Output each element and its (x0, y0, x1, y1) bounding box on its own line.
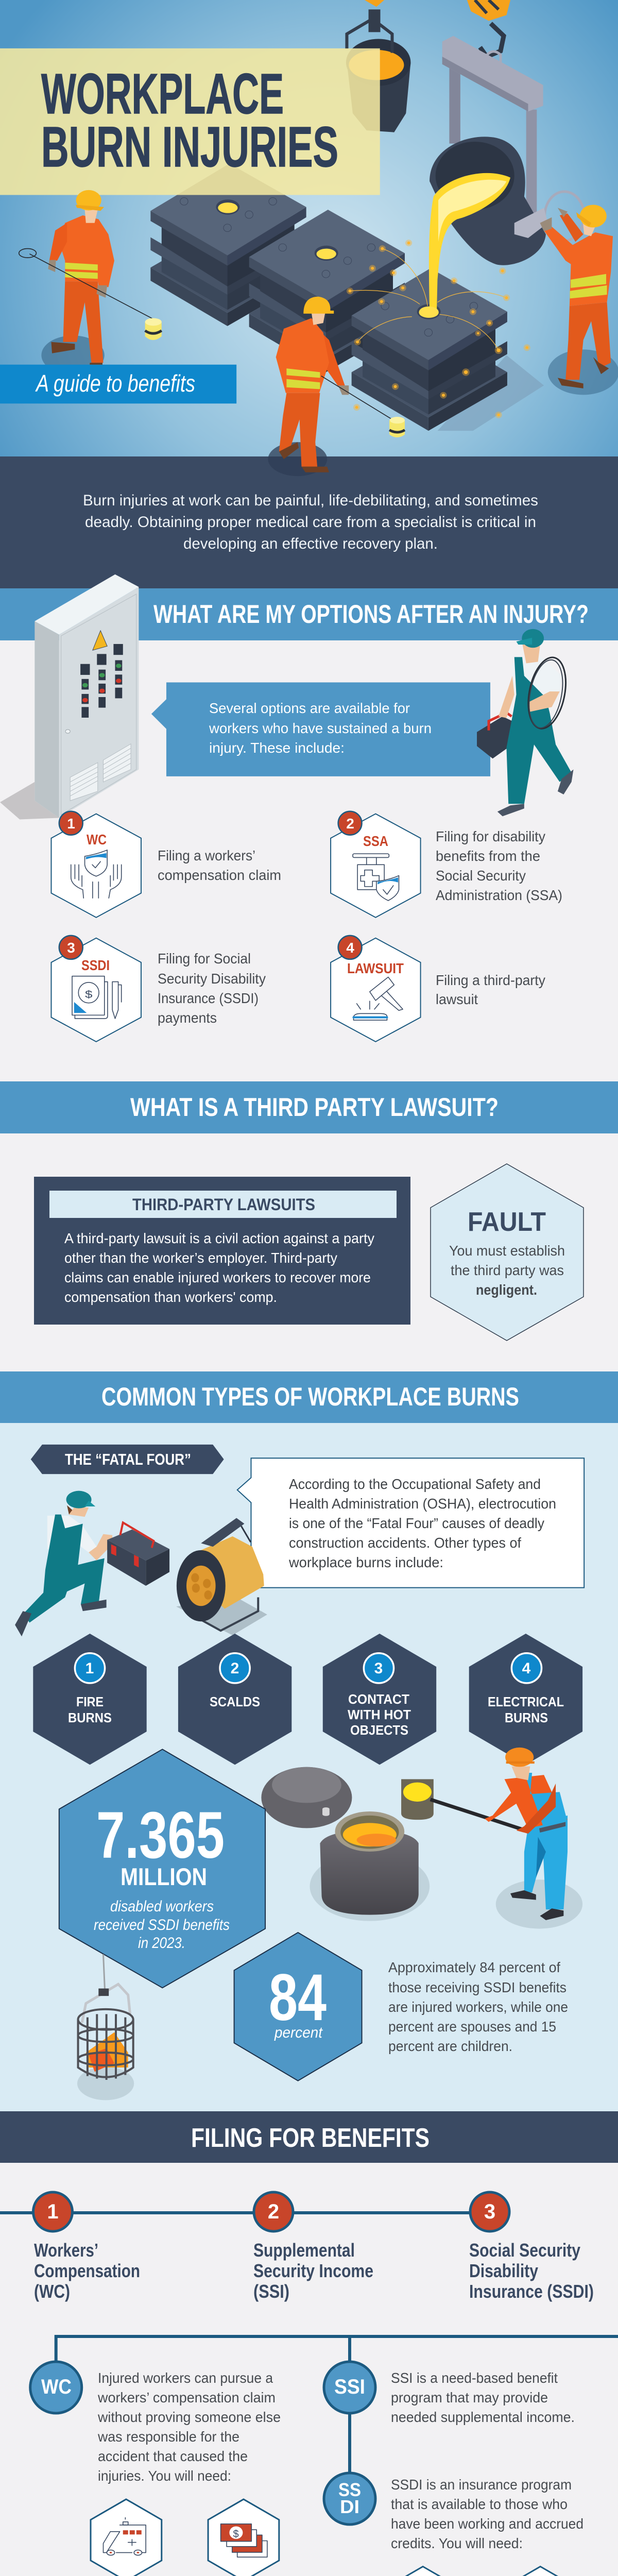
options heading band (0, 588, 618, 640)
fault text: negligent. (476, 1282, 537, 1298)
callout text: injury. These include: (209, 740, 345, 756)
circle labels (41, 2376, 365, 2517)
option descriptions: compensation claim (158, 867, 281, 883)
ssdi breakdown text: Approximately 84 percent of (388, 1959, 560, 1975)
main title: BURN INJURIES (41, 115, 338, 179)
hero banner (0, 48, 380, 195)
timeline numbers (47, 2200, 495, 2223)
fault hexagon (431, 1164, 583, 1341)
benefit names: Supplemental (253, 2240, 355, 2261)
burn hexagon 2 (178, 1634, 291, 1765)
ssdi breakdown text (388, 1959, 568, 2054)
furnace pot (310, 1811, 430, 1921)
electrician with cable (477, 629, 574, 816)
circle labels: SSI (334, 2376, 365, 2398)
option descriptions: Insurance (SSDI) (158, 990, 259, 1006)
options section background (0, 588, 618, 1082)
WC text: injuries. You will need: (98, 2468, 231, 2484)
callout text: Several options are available for (209, 700, 410, 716)
burn labels: WITH HOT (348, 1707, 411, 1722)
timeline line (0, 2211, 490, 2214)
percent label: percent (274, 2024, 323, 2041)
option descriptions: payments (158, 1010, 217, 1026)
foundry worker head (505, 1748, 535, 1780)
hexagon labels: SSA (363, 833, 388, 849)
ssdi breakdown text: percent are spouses and 15 (388, 2019, 556, 2035)
burn numbers: 2 (231, 1660, 239, 1677)
timeline circle 3 (470, 2192, 509, 2231)
fault text: You must establish (449, 1243, 565, 1259)
taxes hexagon (505, 2567, 576, 2576)
timeline circle 2 (254, 2192, 293, 2231)
fatal four text: Health Administration (OSHA), electrocution (289, 1496, 556, 1512)
fatal four text (288, 1476, 556, 1570)
badge 4 (338, 936, 362, 959)
badge 2 (338, 811, 362, 835)
hexagon 1 (51, 814, 141, 918)
number circles (75, 1653, 542, 1683)
hexagon labels: LAWSUIT (347, 960, 404, 976)
panel text: compensation than workers' comp. (64, 1289, 277, 1305)
option descriptions: Social Security (436, 868, 526, 884)
mould stacks (150, 164, 544, 431)
fatal four text: According to the Occupational Safety and (289, 1476, 541, 1492)
burns heading band (0, 1371, 618, 1423)
benefit names: Security Income (253, 2260, 373, 2281)
burn labels: SCALDS (210, 1694, 260, 1709)
7.365 stat (94, 1799, 230, 1952)
burn hexagon 3 (323, 1634, 436, 1765)
cable reel (176, 1518, 267, 1635)
icon: $ on document: $ (85, 989, 92, 1000)
WC text (97, 2370, 281, 2484)
timeline numbers: 1 (47, 2200, 59, 2223)
hexagon labels: WC (87, 832, 107, 848)
intro band background (0, 456, 618, 590)
sparks (349, 242, 528, 416)
benefit names: Disability (469, 2260, 538, 2281)
burn labels: OBJECTS (350, 1722, 408, 1738)
callout panel (151, 682, 490, 776)
badge numbers (67, 816, 354, 956)
connector lines (56, 2336, 618, 2504)
history hexagon (387, 2567, 458, 2576)
foundry worker (485, 1773, 582, 1929)
wages hexagon (208, 2499, 279, 2576)
fault text: the third party was (451, 1262, 564, 1278)
SSDI text: that is available to those who (391, 2496, 568, 2512)
burn labels: ELECTRICAL (488, 1694, 564, 1709)
benefit names: Social Security (469, 2240, 580, 2261)
heading: filing: FILING FOR BENEFITS (191, 2123, 430, 2153)
hexagon 2 (331, 814, 421, 918)
stat caption (94, 1898, 230, 1952)
benefit names: (WC) (34, 2281, 70, 2302)
ssdi breakdown text: those receiving SSDI benefits (388, 1979, 566, 1995)
burn labels: CONTACT (348, 1691, 409, 1707)
hexagon 4 (331, 938, 421, 1042)
84 percent stat: 84 (269, 1961, 327, 2035)
benefit names: Workers’ (34, 2240, 98, 2261)
subtitle: A guide to benefits (35, 370, 195, 397)
option descriptions: Administration (SSA) (436, 887, 562, 903)
burn labels: BURNS (505, 1710, 548, 1725)
circle labels: DI (340, 2496, 359, 2517)
hanging ladle (346, 0, 410, 132)
ssdi breakdown text: percent are children. (388, 2038, 512, 2054)
SSDI circle (324, 2473, 375, 2524)
option descriptions: Security Disability (158, 971, 266, 987)
burn numbers: 4 (522, 1660, 531, 1677)
WC text: Injured workers can pursue a (98, 2370, 273, 2386)
option descriptions: benefits from the (436, 848, 540, 864)
requirement artwork (44, 2499, 618, 2576)
fatal four tag text: THE “FATAL FOUR” (65, 1450, 191, 1468)
84 hexagon (234, 1933, 362, 2081)
SSDI text: SSDI is an insurance program (391, 2477, 572, 2493)
hexagon labels: SSDI (81, 957, 110, 973)
filing section background (0, 2163, 618, 2576)
callout text: workers who have sustained a burn (209, 720, 432, 736)
electrical cabinet (0, 574, 139, 819)
toolbox (107, 1522, 169, 1586)
badge numbers: 3 (67, 940, 75, 956)
option descriptions: Filing a workers’ (158, 848, 255, 863)
third party panel (34, 1177, 410, 1325)
burn labels: FIRE (76, 1694, 104, 1709)
SSI text (391, 2370, 575, 2425)
SSDI text (391, 2477, 583, 2551)
panel text: other than the worker’s employer. Third-party (64, 1250, 337, 1266)
crucible and rod (401, 1779, 548, 1838)
icon: gavel (353, 977, 403, 1020)
SSI text: needed supplemental income. (391, 2409, 575, 2425)
callout text (209, 700, 432, 756)
burn hexagon 4 (469, 1634, 582, 1765)
panel heading bar (49, 1191, 397, 1218)
left worker (19, 190, 162, 375)
right worker (540, 205, 618, 395)
burn labels (68, 1691, 564, 1738)
burns section background (0, 1423, 618, 2112)
circle labels: SS (338, 2479, 361, 2500)
panel text (64, 1230, 374, 1305)
icon: ambulance (104, 2518, 146, 2555)
WC text: accident that caused the (98, 2448, 248, 2464)
stat caption: received SSDI benefits (94, 1917, 230, 1934)
hexagon 3 (51, 938, 141, 1042)
ssdi breakdown text: are injured workers, while one (388, 1999, 568, 2015)
fatal four tag (31, 1445, 224, 1474)
blue tag (0, 365, 236, 403)
option descriptions: lawsuit (436, 991, 478, 1007)
filing heading band (0, 2111, 618, 2163)
WC text: without proving someone else (97, 2409, 281, 2425)
benefit names: Insurance (SSDI) (469, 2281, 594, 2302)
third party heading band (0, 1081, 618, 1133)
burn labels: BURNS (68, 1710, 112, 1725)
main title: WORKPLACE (41, 62, 284, 126)
hexagon labels (81, 832, 404, 976)
heading: burns: COMMON TYPES OF WORKPLACE BURNS (101, 1382, 519, 1411)
fatal four text: workplace burns include: (288, 1554, 443, 1570)
SSI text: SSI is a need-based benefit (391, 2370, 558, 2386)
benefit names (34, 2240, 594, 2302)
7.365 stat: 7.365 (96, 1799, 225, 1872)
pouring frame (442, 36, 543, 234)
icon: medical shield (353, 854, 399, 901)
crane hook (467, 0, 510, 57)
pouring ladle (429, 137, 584, 314)
icon symbols: $ (233, 2529, 239, 2540)
SSI text: program that may provide (391, 2389, 548, 2405)
badge 3 (59, 936, 83, 959)
stat caption: in 2023. (138, 1935, 185, 1952)
WC circle (30, 2362, 82, 2413)
badge numbers: 1 (67, 816, 75, 832)
fatal four text: construction accidents. Other types of (289, 1535, 521, 1551)
front worker (268, 297, 405, 476)
SSDI text: credits. You will need: (391, 2535, 523, 2551)
kneeling worker (15, 1491, 112, 1636)
stat caption: disabled workers (110, 1898, 214, 1915)
intro text: deadly. Obtaining proper medical care from a specialist is critical in (85, 514, 536, 531)
furnace artwork (59, 1748, 582, 2100)
7.365 hexagon (59, 1749, 265, 1988)
option descriptions: Filing for disability (436, 828, 545, 844)
burn numbers: 1 (85, 1660, 94, 1677)
hero background (0, 0, 618, 459)
burn numbers (85, 1660, 531, 1677)
timeline circle 1 (33, 2192, 72, 2231)
burns artwork (15, 1445, 584, 1765)
burn hexagon 1 (33, 1634, 147, 1765)
panel text: A third-party lawsuit is a civil action against a party (64, 1230, 374, 1246)
badge numbers: 4 (346, 940, 354, 956)
spark trails (350, 249, 506, 350)
ore basket (77, 1954, 134, 2100)
option descriptions: Filing for Social (158, 951, 251, 967)
intro text: developing an effective recovery plan. (183, 535, 438, 552)
heading: third party: WHAT IS A THIRD PARTY LAWSUIT? (130, 1093, 499, 1122)
SSI circle (324, 2362, 375, 2413)
panel heading: THIRD-PARTY LAWSUITS (132, 1195, 315, 1214)
icon: money document and pen (72, 976, 122, 1019)
burn numbers: 3 (374, 1660, 383, 1677)
third party section background (0, 1081, 618, 1372)
icon: stacked money (221, 2524, 267, 2557)
WC text: workers’ compensation claim (97, 2389, 276, 2405)
fatal four callout (237, 1458, 584, 1588)
proof hexagon (91, 2499, 162, 2576)
timeline numbers: 3 (484, 2200, 495, 2223)
SSDI text: have been working and accrued (391, 2516, 583, 2532)
hero illustration: foundry (0, 0, 618, 476)
benefit names: Compensation (34, 2260, 140, 2281)
fault heading: FAULT (468, 1207, 546, 1237)
badge 1 (59, 811, 83, 835)
million: MILLION (121, 1863, 207, 1890)
timeline numbers: 2 (268, 2200, 279, 2223)
badge numbers: 2 (346, 816, 354, 832)
panel text: claims can enable injured workers to recover more (64, 1269, 371, 1285)
main title (41, 62, 338, 179)
furnace lid (261, 1767, 352, 1828)
fatal four text: is one of the “Fatal Four” causes of deadly (289, 1515, 544, 1531)
section 2 artwork (0, 574, 574, 1042)
option descriptions (158, 828, 562, 1026)
benefit names: (SSI) (253, 2281, 289, 2302)
intro text: Burn injuries at work can be painful, life-debilitating, and sometimes (83, 492, 538, 509)
WC text: was responsible for the (97, 2429, 239, 2445)
icon: shield and hands (71, 850, 122, 898)
option descriptions: Filing a third-party (436, 972, 545, 988)
fault text (449, 1243, 565, 1298)
intro text (83, 492, 538, 552)
molten pour hole (419, 307, 439, 318)
circle labels: WC (41, 2376, 72, 2398)
